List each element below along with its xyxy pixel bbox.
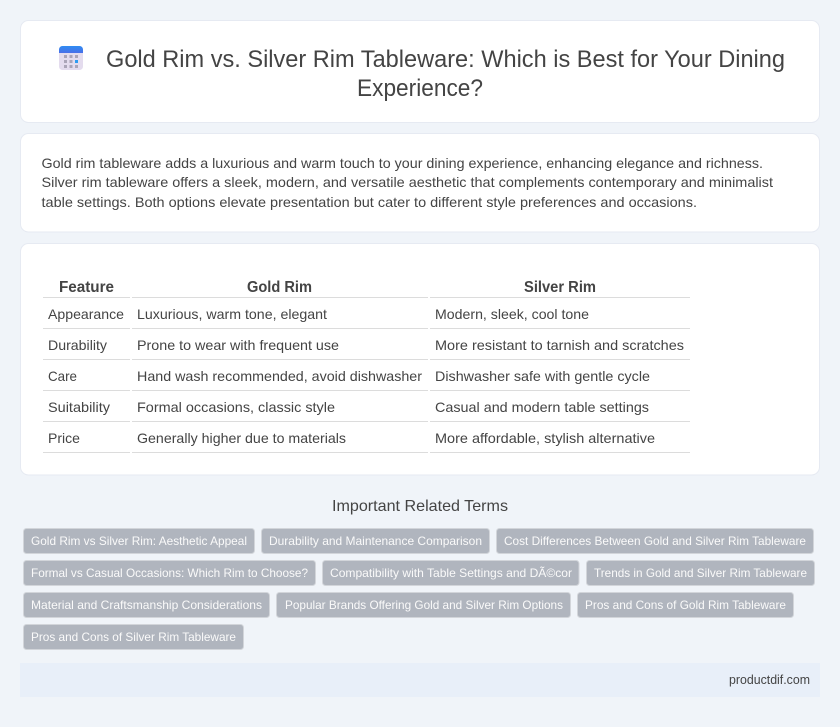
tag — [578, 592, 794, 618]
row: price: More affordable, stylish alternative — [435, 430, 655, 446]
row: care: Dishwasher safe with gentle cycle — [435, 368, 650, 384]
tag — [262, 528, 490, 554]
tag: Gold Rim vs Silver Rim: Aesthetic Appeal — [31, 534, 247, 548]
row: price: Generally higher due to materials — [137, 430, 346, 446]
panel: title card — [20, 20, 820, 122]
row: care — [48, 368, 650, 384]
table header — [59, 279, 596, 296]
intro text: table settings. Both options elevate presentation but cater to different style preferences and occasions. — [42, 194, 697, 210]
intro text: Silver rim tableware offers a sleek, modern, and versatile aesthetic that complements contemporary and minimalist — [42, 174, 773, 190]
tag — [24, 528, 254, 554]
tag — [24, 592, 270, 618]
tag: Durability and Maintenance Comparison — [269, 534, 482, 548]
title: Gold Rim vs. Silver Rim Tableware: Which is Best for Your Dining — [106, 46, 785, 73]
tag — [586, 560, 814, 586]
row: care: Hand wash recommended, avoid dishwasher — [137, 368, 422, 384]
tag — [24, 560, 316, 586]
row: suitability: Formal occasions, classic style — [137, 399, 335, 415]
row: price — [48, 430, 655, 446]
tag: Popular Brands Offering Gold and Silver Rim Options — [285, 598, 563, 612]
row: suitability — [48, 399, 649, 415]
row: appearance: Appearance — [48, 306, 124, 322]
table header: Gold Rim — [247, 279, 312, 296]
intro text: Gold rim tableware adds a luxurious and warm touch to your dining experience, enhancing elegance and richness. — [42, 155, 763, 171]
tag: Pros and Cons of Gold Rim Tableware — [585, 598, 786, 612]
row: durability — [48, 337, 684, 353]
icon: calendar — [59, 46, 83, 70]
panel: introduction — [20, 134, 820, 232]
title — [106, 46, 785, 102]
tag — [496, 528, 814, 554]
row: appearance: Modern, sleek, cool tone — [435, 306, 589, 322]
row: suitability: Casual and modern table settings — [435, 399, 649, 415]
tag: Cost Differences Between Gold and Silver Rim Tableware — [504, 534, 806, 548]
tag — [276, 592, 570, 618]
row: durability: Prone to wear with frequent use — [137, 337, 339, 353]
row: price: Price — [48, 430, 80, 446]
row: appearance — [48, 306, 589, 322]
row: durability: More resistant to tarnish and scratches — [435, 337, 684, 353]
row: care: Care — [48, 368, 77, 384]
tag: Material and Craftsmanship Considerations — [31, 598, 262, 612]
title: Experience? — [357, 75, 483, 102]
heading: important related terms: Important Related Terms — [332, 498, 508, 515]
row: durability: Durability — [48, 337, 107, 353]
tag: Compatibility with Table Settings and DÃ©cor — [330, 566, 572, 580]
tag: Trends in Gold and Silver Rim Tableware — [594, 566, 807, 580]
panel: comparison table — [20, 244, 820, 475]
tag — [24, 624, 244, 650]
tag: Formal vs Casual Occasions: Which Rim to Choose? — [31, 566, 308, 580]
related term tags — [24, 528, 814, 650]
footer: productdif.com — [729, 672, 810, 687]
tag: Pros and Cons of Silver Rim Tableware — [31, 630, 236, 644]
tag — [322, 560, 579, 586]
table header: Feature — [59, 279, 114, 296]
table header: Silver Rim — [524, 279, 596, 296]
intro text — [42, 155, 773, 210]
row: appearance: Luxurious, warm tone, elegant — [137, 306, 327, 322]
footer — [20, 663, 820, 697]
row: suitability: Suitability — [48, 399, 110, 415]
